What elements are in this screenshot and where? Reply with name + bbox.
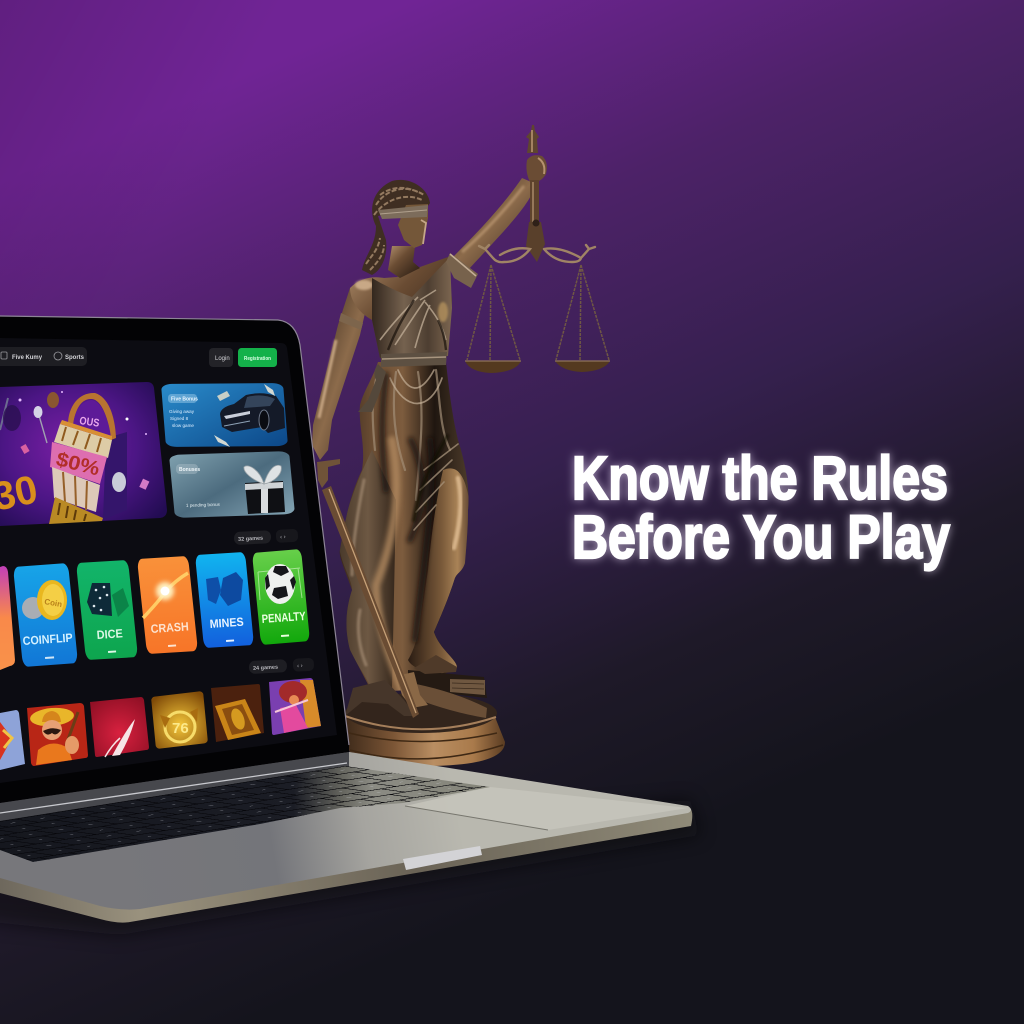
slot thumbnails row	[0, 678, 321, 770]
promo card: car: Five Bonus	[171, 396, 198, 402]
section control 1: 32 games	[238, 536, 263, 543]
palm rest right panel	[405, 787, 688, 830]
game card: dice	[76, 560, 138, 660]
sword	[317, 459, 419, 718]
game card: coinflip: COINFLIP	[22, 631, 73, 648]
screen	[0, 338, 337, 783]
statue base	[345, 655, 505, 766]
slot machine: $0%	[54, 449, 102, 481]
game card: penalty: PENALTY	[261, 609, 306, 626]
laptop base deck	[0, 752, 692, 923]
promo card: gift: 1 pending bonus	[186, 502, 221, 508]
book	[408, 670, 487, 698]
left pan and chains	[465, 265, 521, 373]
thumbnail: rocket	[90, 697, 149, 757]
game cards row	[0, 549, 310, 670]
promo card: gift: Bonuses	[179, 467, 200, 473]
navigation bar: Login	[215, 356, 230, 362]
promo card: car: Giving away	[169, 409, 195, 414]
laptop	[0, 316, 692, 923]
car	[220, 393, 285, 433]
game card: coinflip	[13, 563, 78, 667]
thumbnail: gold coin	[151, 691, 208, 749]
game card: penalty	[252, 549, 310, 645]
table shadow under laptop	[0, 800, 700, 935]
outer left drape	[340, 450, 396, 690]
raised arm and hand	[448, 155, 547, 270]
promo card: gift	[169, 451, 295, 518]
sash knot	[358, 364, 386, 412]
torso and gown	[350, 253, 478, 412]
section control 2	[249, 658, 314, 674]
promo card: car	[161, 383, 288, 447]
promo card: car: slow game	[172, 423, 194, 428]
thumbnail: mariachi	[27, 703, 88, 766]
game card: partial	[0, 566, 15, 670]
thumbnail: gold coin: 76	[172, 720, 189, 737]
thumbnail: partial	[0, 710, 25, 770]
title: Before You Play	[572, 503, 950, 571]
navigation bar: Registration	[244, 356, 272, 362]
sleeve	[446, 253, 478, 288]
slot machine	[49, 393, 127, 524]
scales	[465, 125, 610, 373]
navigation bar: Five Kumy	[12, 355, 43, 361]
section control 2: ‹ ›	[297, 663, 303, 670]
navigation bar	[0, 347, 277, 367]
shoe on book	[414, 655, 457, 674]
section control 1	[234, 529, 298, 545]
head	[362, 180, 430, 278]
game card: crash: CRASH	[150, 619, 189, 636]
game card: coinflip: Coin	[44, 597, 63, 609]
skirt	[340, 362, 468, 691]
game card: mines	[195, 552, 254, 648]
draped cloth	[345, 680, 416, 716]
slot machine: OUS	[79, 415, 100, 430]
thumbnail: mariachi violinist	[269, 678, 321, 735]
blindfold	[378, 205, 428, 219]
hero banner: slot machine	[0, 382, 167, 526]
hinge band	[0, 752, 349, 822]
foot on base	[396, 672, 428, 708]
skirt folds	[352, 370, 461, 695]
section control 1: ‹ ›	[280, 534, 286, 541]
title	[572, 444, 950, 571]
thumbnail: golden book	[211, 684, 264, 742]
title: Know the Rules	[572, 444, 948, 512]
game card: mines: MINES	[209, 615, 244, 631]
lid	[0, 316, 349, 803]
game card: crash	[137, 556, 198, 654]
section control 2: 24 games	[253, 665, 278, 672]
statue: Lady Justice	[312, 125, 610, 766]
navigation bar: Sports	[65, 355, 85, 361]
promo card: car: Signed 8	[170, 416, 189, 421]
game card: dice: DICE	[96, 626, 123, 642]
keyboard	[0, 766, 490, 862]
right leg	[408, 468, 470, 674]
right pan and chains	[555, 265, 610, 372]
waist sash	[381, 352, 447, 367]
front notch	[403, 846, 482, 870]
left arm	[312, 288, 368, 460]
